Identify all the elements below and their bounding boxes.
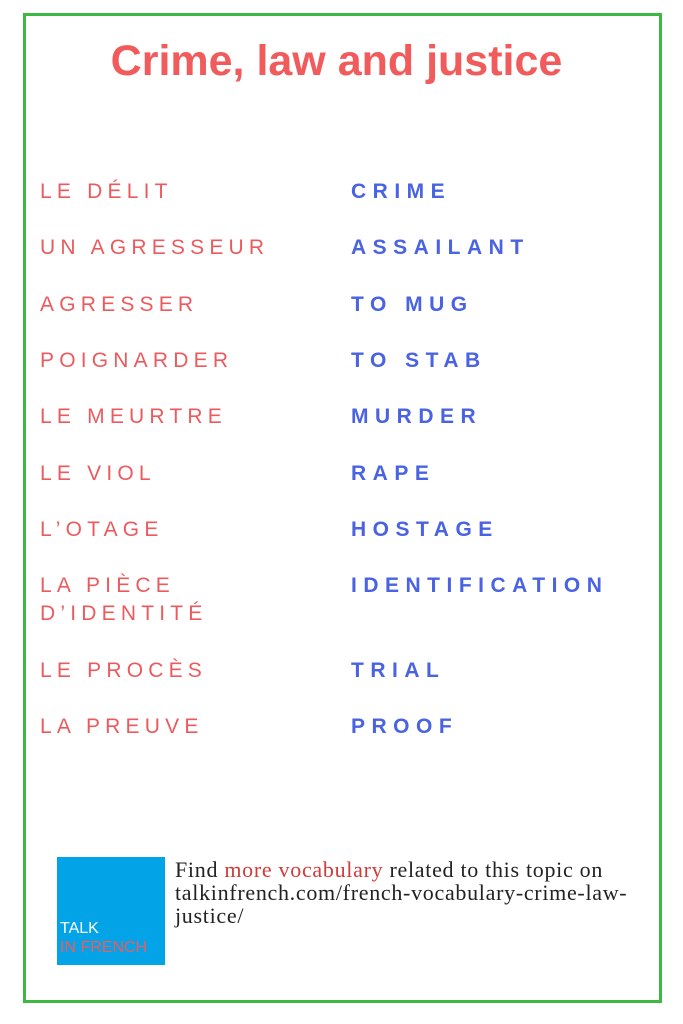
text: ASSAILANT <box>351 236 530 259</box>
row 6 <box>40 462 435 485</box>
text: UN AGRESSEUR <box>40 236 269 259</box>
text: LA PREUVE <box>40 715 204 738</box>
text: TRIAL <box>351 659 445 682</box>
text: HOSTAGE <box>351 518 499 541</box>
vocabulary list <box>40 180 608 738</box>
text: D’IDENTITÉ <box>40 602 208 625</box>
text: CRIME <box>351 180 451 203</box>
text: TO MUG <box>351 293 474 316</box>
title: Crime, law and justice <box>111 37 562 85</box>
row 8 <box>40 574 608 625</box>
text: AGRESSER <box>40 293 198 316</box>
text: POIGNARDER <box>40 349 233 372</box>
footer text: justice/ <box>175 903 244 928</box>
logo: TALK <box>60 920 99 937</box>
footer text: Find more vocabulary related to this topic on <box>175 857 603 882</box>
text: L’OTAGE <box>40 518 164 541</box>
text: LA PIÈCE <box>40 574 175 597</box>
text: IDENTIFICATION <box>351 574 608 597</box>
logo: IN FRENCH <box>60 939 147 956</box>
text: PROOF <box>351 715 458 738</box>
footer text: talkinfrench.com/french-vocabulary-crime-law- <box>175 880 627 905</box>
text: LE DÉLIT <box>40 180 173 203</box>
text: LE PROCÈS <box>40 659 207 682</box>
text: LE VIOL <box>40 462 156 485</box>
text: MURDER <box>351 405 482 428</box>
footer text <box>174 857 627 928</box>
row 3 <box>40 293 474 316</box>
row 7 <box>40 518 499 541</box>
row 10 <box>40 715 458 738</box>
row 9 <box>40 658 445 682</box>
logo <box>57 857 165 965</box>
text: LE MEURTRE <box>40 405 227 428</box>
text: RAPE <box>351 462 435 485</box>
row 1 <box>40 180 451 203</box>
text: TO STAB <box>351 349 487 372</box>
row 4 <box>40 349 487 372</box>
row 2 <box>40 236 530 259</box>
row 5 <box>40 405 482 428</box>
